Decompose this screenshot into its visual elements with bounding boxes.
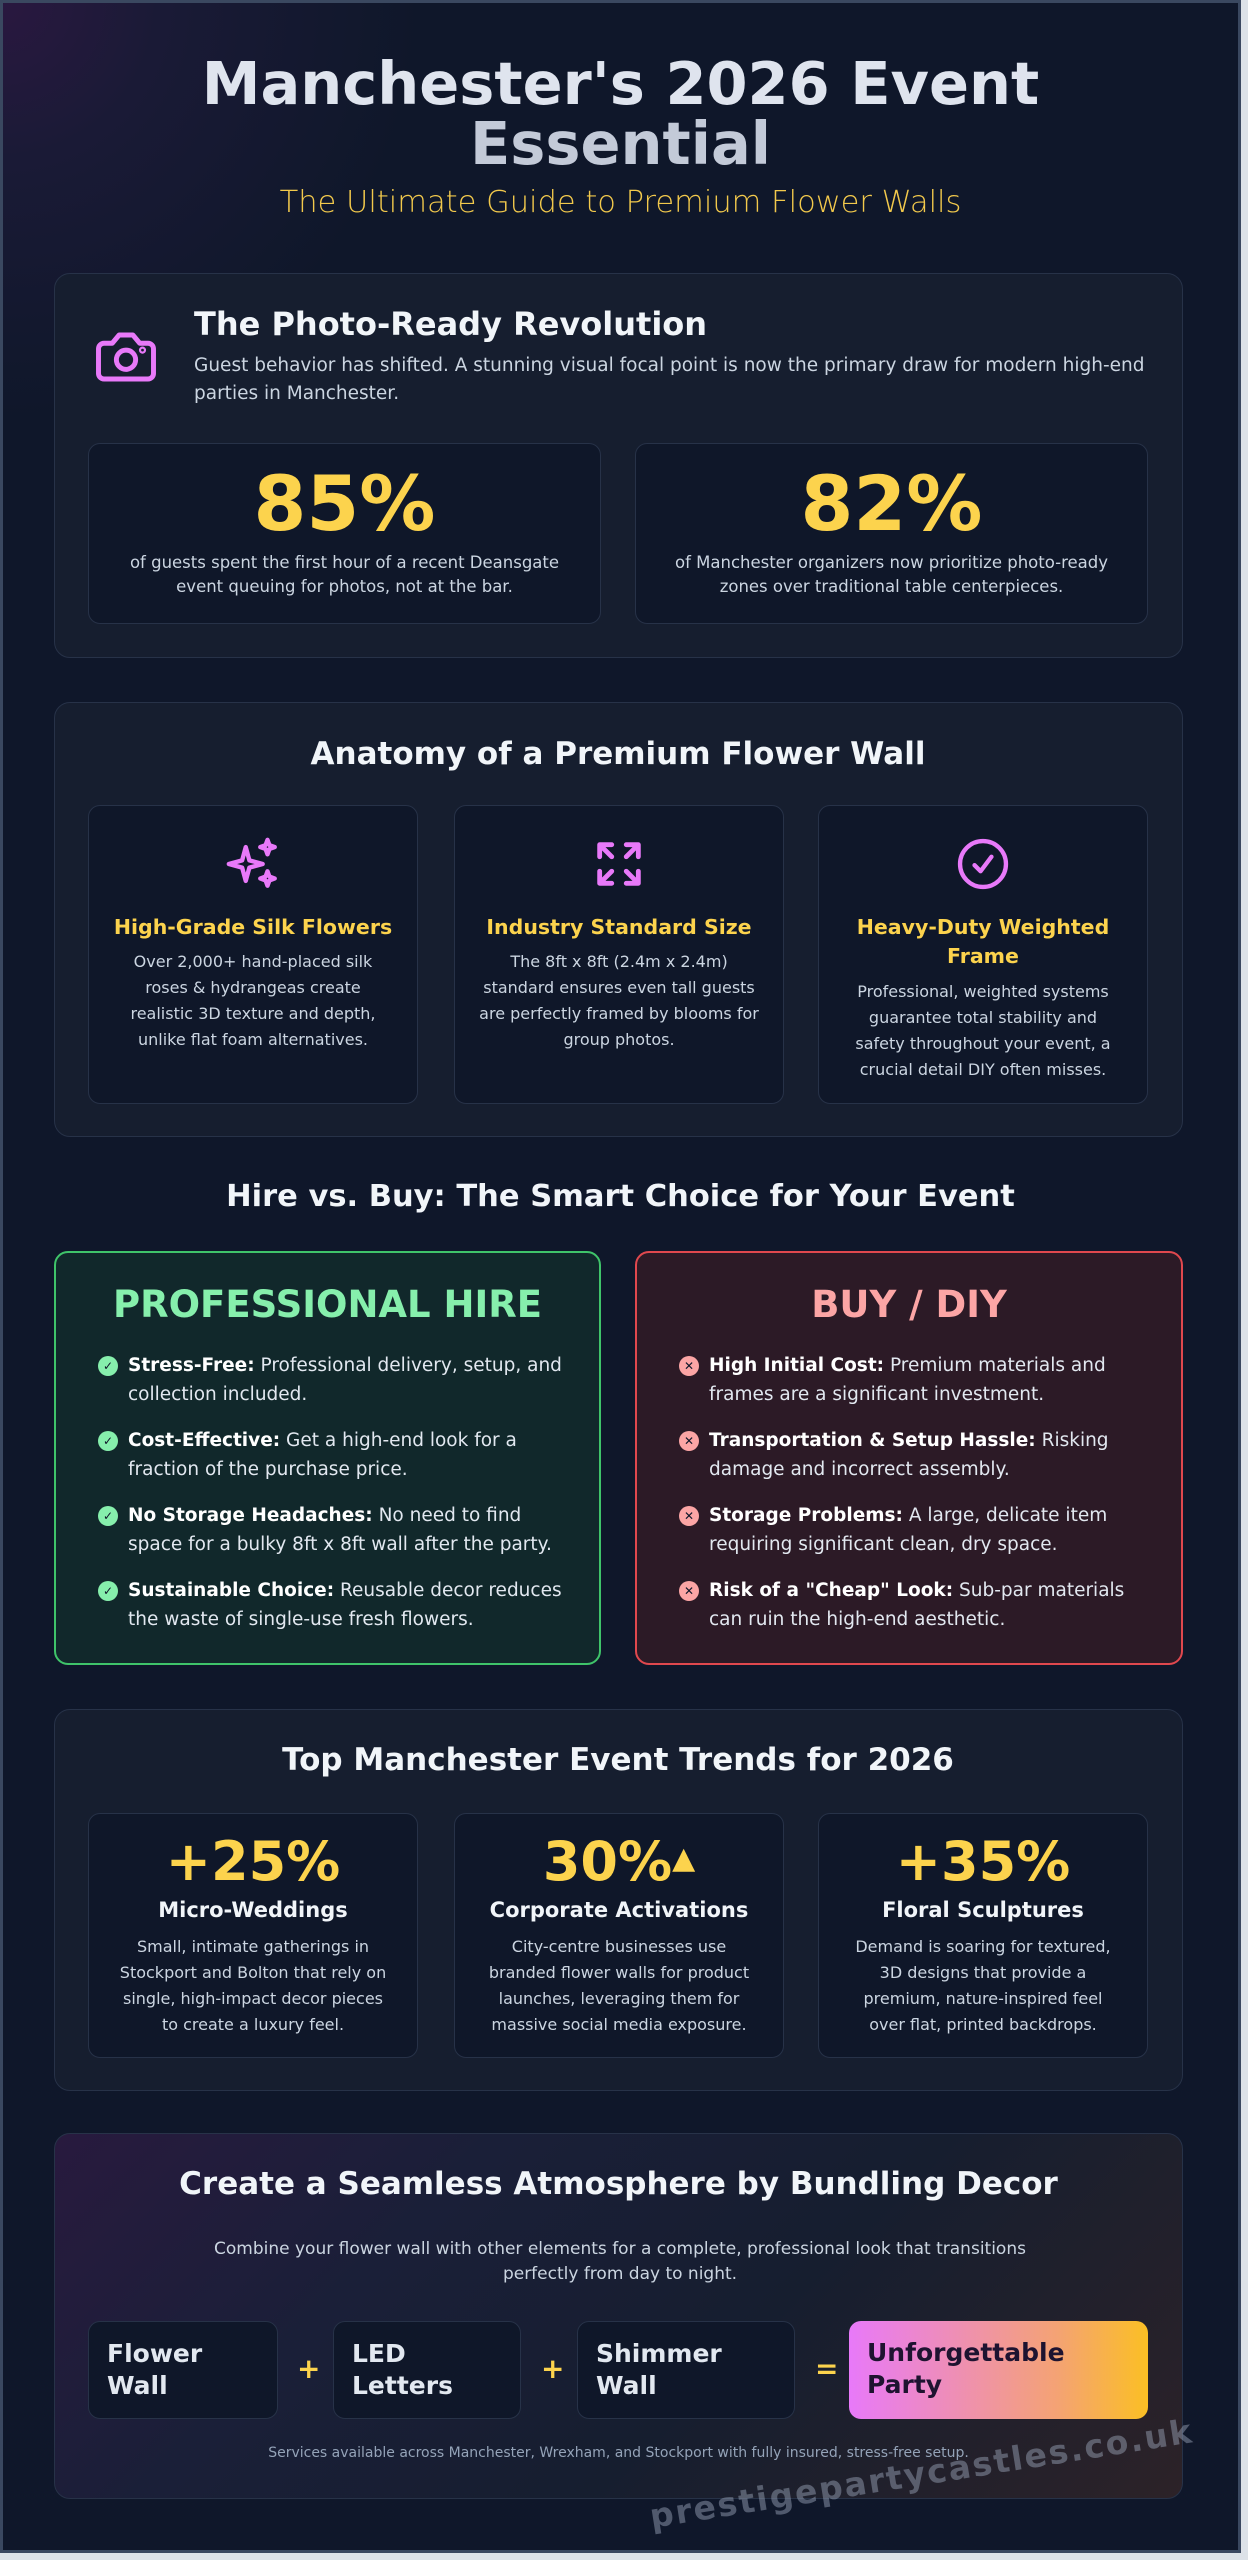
box: LED letters: Letters	[352, 2371, 453, 2400]
equation: +	[297, 2352, 320, 2385]
heading: The Photo-Ready Revolution	[194, 305, 707, 343]
heading: hire vs buy: Hire vs. Buy: The Smart Choice for Your Event	[226, 1179, 1015, 1214]
panel: professional hire: ✓	[103, 1509, 113, 1523]
title: Manchester's 2026 Event	[202, 49, 1039, 118]
box: flower wall	[88, 2321, 278, 2419]
icon: sparkles	[226, 838, 277, 888]
trend card: City-centre businesses use branded flower walls for product launches, leveraging them for massive social media exposure.	[489, 1937, 749, 2034]
card: weighted frame	[818, 805, 1148, 1104]
stat: 85%	[88, 443, 601, 624]
box: LED letters: LED	[352, 2339, 406, 2368]
item: Cost-Effective: Get a high-end look for a fraction of the purchase price.	[128, 1430, 517, 1480]
title	[202, 49, 1039, 178]
icon: check circle	[958, 838, 1008, 890]
equation: =	[815, 2352, 838, 2385]
footer note: Services available across Manchester, Wrexham, and Stockport with fully insured, stress-free setup.	[268, 2445, 969, 2461]
subtitle: The Ultimate Guide to Premium Flower Walls	[280, 185, 961, 220]
box: LED letters	[333, 2321, 521, 2419]
trend card: Micro-Weddings	[158, 1898, 348, 1922]
box: flower wall: Flower	[107, 2339, 202, 2368]
panel: professional hire: ✓	[103, 1584, 113, 1598]
trend card: Floral Sculptures	[882, 1898, 1084, 1922]
trend card: 30%▲	[543, 1830, 695, 1893]
card: weighted frame: Heavy-Duty Weighted Frame	[857, 915, 1109, 968]
icon: camera	[96, 332, 156, 382]
watermark: prestigepartycastles.co.uk	[647, 2411, 1196, 2536]
heading: Top Manchester Event Trends for 2026	[282, 1742, 954, 1778]
text block: Combine your flower wall with other elements for a complete, professional look that transitions perfectly from day to night.	[214, 2239, 1026, 2284]
item: High Initial Cost: Premium materials and frames are a significant investment.	[709, 1355, 1106, 1405]
title: Essential	[470, 109, 771, 178]
box: flower wall: Wall	[107, 2371, 168, 2400]
panel: professional hire: ✓	[103, 1434, 113, 1448]
card: silk flowers: Over 2,000+ hand-placed silk roses & hydrangeas create realistic 3D texture and depth, unlike flat foam alternatives.	[130, 952, 376, 1049]
stat: 85%: of guests spent the first hour of a recent Deansgate event queuing for photos, not at the bar.	[130, 553, 559, 596]
panel: anatomy	[54, 702, 1183, 1137]
box: shimmer wall: Shimmer	[596, 2339, 722, 2368]
stat: 82%	[635, 443, 1148, 624]
item: Transportation & Setup Hassle: Risking damage and incorrect assembly.	[709, 1430, 1109, 1480]
card: silk flowers	[88, 805, 418, 1104]
panel: professional hire: PROFESSIONAL HIRE	[113, 1283, 542, 1326]
panel: buy / diy: ✕	[684, 1359, 694, 1373]
panel: buy / diy: ✕	[684, 1509, 694, 1523]
icon: expand arrows	[597, 842, 641, 886]
card: silk flowers: High-Grade Silk Flowers	[114, 915, 392, 939]
box: result	[849, 2321, 1148, 2419]
card: standard size: Industry Standard Size	[486, 915, 752, 939]
box: shimmer wall	[577, 2321, 795, 2419]
panel: professional hire	[54, 1251, 601, 1665]
panel: bundling	[54, 2133, 1183, 2499]
text block: Guest behavior has shifted. A stunning visual focal point is now the primary draw for modern high-end parties in Manchester.	[194, 355, 1144, 404]
trend card: Demand is soaring for textured, 3D designs that provide a premium, nature-inspired feel over flat, printed backdrops.	[855, 1937, 1111, 2034]
heading: Anatomy of a Premium Flower Wall	[311, 736, 925, 772]
panel: buy / diy: ✕	[684, 1584, 694, 1598]
item: Stress-Free: Professional delivery, setup, and collection included.	[128, 1355, 562, 1405]
card: standard size	[454, 805, 784, 1104]
stat: 85%: 85%	[254, 459, 435, 548]
box: shimmer wall: Wall	[596, 2371, 657, 2400]
item: Sustainable Choice: Reusable decor reduces the waste of single-use fresh flowers.	[128, 1580, 562, 1630]
stat: 82%: of Manchester organizers now prioritize photo-ready zones over traditional table centerpieces.	[675, 553, 1108, 596]
trend card	[818, 1813, 1148, 2058]
card: weighted frame: Professional, weighted systems guarantee total stability and safety throughout your event, a crucial detail DIY often misses.	[855, 982, 1111, 1079]
trend card: +25%	[166, 1830, 340, 1893]
trend card: Corporate Activations	[490, 1898, 748, 1922]
item: Storage Problems: A large, delicate item requiring significant clean, dry space.	[709, 1505, 1107, 1555]
panel: buy / diy	[635, 1251, 1183, 1665]
item: No Storage Headaches: No need to find space for a bulky 8ft x 8ft wall after the party.	[128, 1505, 552, 1555]
trend card	[88, 1813, 418, 2058]
heading: Create a Seamless Atmosphere by Bundling Decor	[179, 2166, 1058, 2202]
panel: professional hire: ✓	[103, 1359, 113, 1373]
trend card: Small, intimate gatherings in Stockport and Bolton that rely on single, high-impact decor pieces to create a luxury feel.	[120, 1937, 386, 2034]
equation: +	[541, 2352, 564, 2385]
trend card	[454, 1813, 784, 2058]
box: result: Unforgettable	[867, 2338, 1065, 2367]
panel: buy / diy: BUY / DIY	[811, 1283, 1007, 1326]
panel: trends	[54, 1709, 1183, 2091]
trend card: +35%	[896, 1830, 1070, 1893]
stat: 82%: 82%	[801, 459, 982, 548]
card: standard size: The 8ft x 8ft (2.4m x 2.4m) standard ensures even tall guests are perfectly framed by blooms for group photos.	[479, 952, 759, 1049]
item: Risk of a "Cheap" Look: Sub-par materials can ruin the high-end aesthetic.	[709, 1580, 1124, 1630]
panel: buy / diy: ✕	[684, 1434, 694, 1448]
box: result: Party	[867, 2370, 942, 2399]
panel: photo-ready revolution	[54, 273, 1183, 658]
